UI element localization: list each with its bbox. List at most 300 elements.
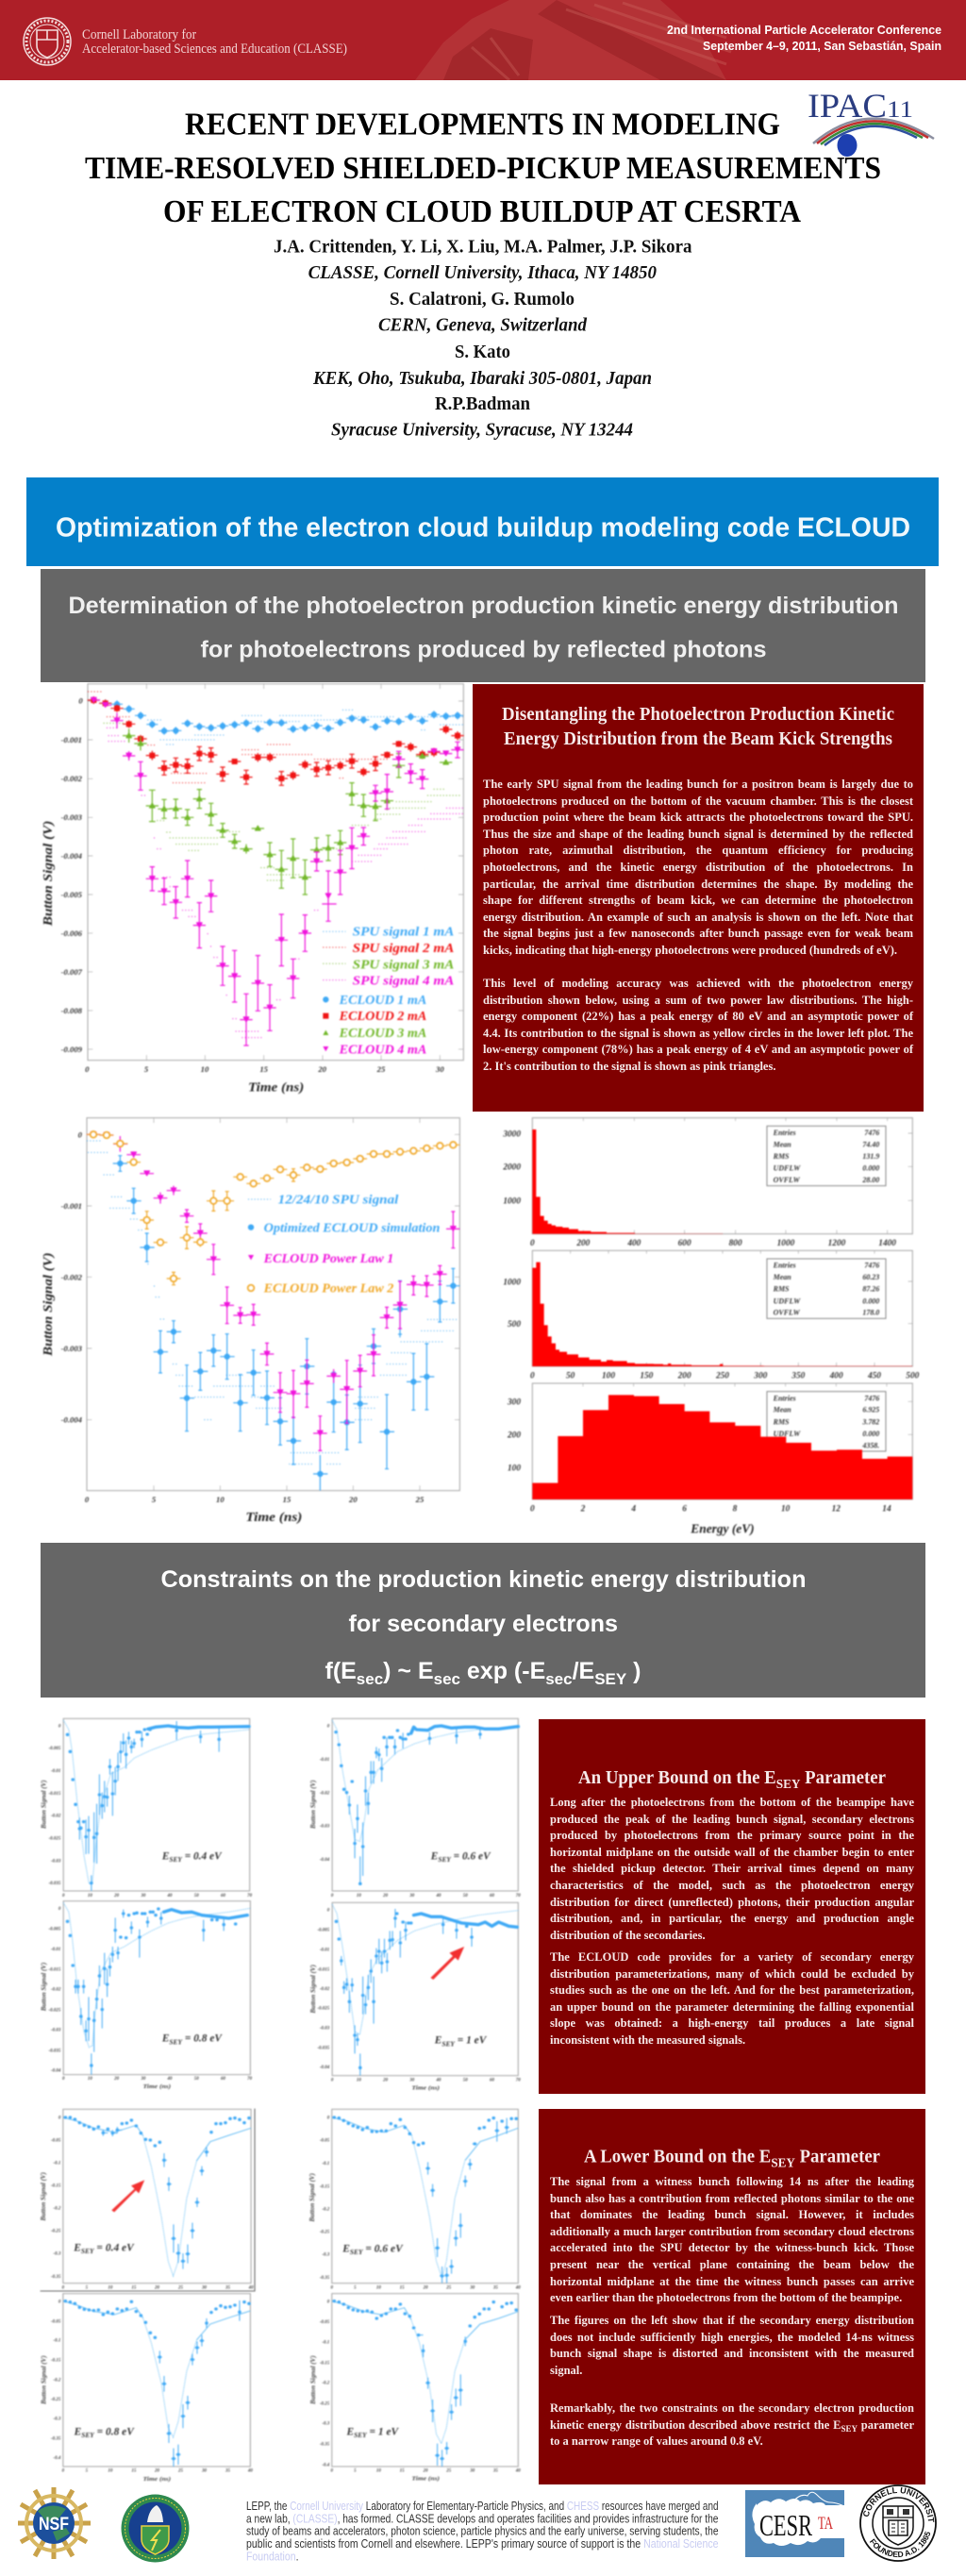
chart: lower bound, ESEY 0.8 eV: 10 (108, 2469, 113, 2474)
section heading: constraints on secondary electrons: SEY (594, 1670, 626, 1688)
chart: lower bound, ESEY 0.4 eV with arrow: 5 (86, 2286, 89, 2291)
histogram 0 to 1400 eV (503, 1117, 913, 1248)
histogram 0 to 500 eV: 300 (754, 1371, 768, 1380)
histogram 0 to 500 eV: 7476 (865, 1261, 880, 1269)
section heading: photoelectron energy distribution (41, 569, 925, 682)
chart: upper bound, ESEY 0.8 eV: 50 (194, 2077, 200, 2082)
legend: ECLOUD Power Law 2 (263, 1281, 394, 1296)
histogram 0 to 500 eV: 450 (867, 1371, 882, 1380)
chart: lower bound, ESEY 0.8 eV: 25 (177, 2469, 184, 2474)
footer text: Foundation. (246, 2550, 298, 2564)
paragraph: witness bunch signal: horizontal midplane at the time the witness bunch passes can arrive (550, 2275, 914, 2288)
section heading: constraints on secondary electrons: ) ~ E (383, 1658, 433, 1684)
panel heading: SEY (776, 1778, 800, 1792)
icon: CESR TA logo: TA (818, 2514, 833, 2534)
histogram 0 to 500 eV: OVFLW (774, 1308, 801, 1316)
section heading: constraints on secondary electrons: /E (572, 1658, 594, 1684)
paragraph: early SPU signal: particular, the arrival time distribution determines the shape. By modeling the (483, 878, 913, 891)
chart: upper bound, ESEY 0.6 eV: 70 (516, 1894, 521, 1899)
chart: lower bound, ESEY 0.8 eV: 0 (58, 2300, 61, 2305)
chart: button signal vs time for four beam currents: -0.002 (61, 774, 83, 783)
chart: lower bound, ESEY 1 eV: -0.1 (322, 2341, 329, 2346)
chart: upper bound, ESEY 1 eV with arrow (309, 1901, 522, 2092)
chart: lower bound, ESEY 0.4 eV with arrow: E (75, 2242, 82, 2254)
paragraph: witness bunch signal: The signal from a witness bunch following 14 ns after the leading (550, 2175, 914, 2188)
chart: lower bound, ESEY 0.6 eV: 35 (492, 2286, 498, 2291)
histogram 0 to 500 eV: 500 (907, 1371, 920, 1380)
section heading: constraints on secondary electrons: sec (433, 1670, 459, 1688)
chart: upper bound, ESEY 1 eV with arrow: 40 (435, 2079, 441, 2083)
chart: lower bound, ESEY 0.6 eV: 15 (400, 2286, 405, 2291)
histogram 0 to 500 eV: 350 (791, 1371, 806, 1380)
histogram 0 to 500 eV: 178.0 (863, 1308, 880, 1316)
histogram 0 to 500 eV: 500 (508, 1320, 522, 1330)
chart: button signal vs time for four beam currents: Button Signal (V) (41, 821, 55, 928)
chart: lower bound, ESEY 0.8 eV: = 0.8 eV (94, 2426, 135, 2437)
paragraph: modeling accuracy: 4.4. Its contribution to the signal is shown as yellow circles in the lower left plot. The (483, 1027, 913, 1040)
chart: lower bound, ESEY 0.4 eV with arrow: -0.3 (54, 2252, 61, 2257)
panel heading (584, 2147, 880, 2171)
chart: upper bound, ESEY 0.8 eV: -0.015 (49, 1968, 61, 1973)
histogram 0 to 1400 eV: 7476 (865, 1129, 880, 1137)
chart: lower bound, ESEY 1 eV: 15 (400, 2469, 405, 2474)
chart: lower bound, ESEY 0.8 eV: 35 (225, 2469, 231, 2474)
chart: button signal vs time for four beam currents: Time (ns) (248, 1080, 305, 1095)
chart: button signal vs time for four beam currents: -0.004 (61, 851, 83, 861)
chart: optimized ECLOUD simulation and power laws (41, 1116, 461, 1525)
histogram 0 to 15 eV: 300 (507, 1397, 522, 1407)
histogram 0 to 500 eV: 250 (715, 1371, 730, 1380)
chart: lower bound, ESEY 1 eV: 40 (515, 2469, 521, 2474)
authors and affiliations: Syracuse University, Syracuse, NY 13244 (331, 419, 633, 440)
histogram 0 to 500 eV: 150 (641, 1371, 654, 1380)
chart: upper bound, ESEY 0.4 eV: 70 (247, 1894, 253, 1899)
section banner: optimization: Optimization of the electron cloud buildup modeling code ECLOUD (56, 513, 910, 544)
chart: lower bound, ESEY 0.8 eV: 20 (154, 2469, 160, 2474)
histogram 0 to 1400 eV: UDFLW (774, 1163, 801, 1172)
chart: optimized ECLOUD simulation and power laws: 20 (348, 1495, 358, 1504)
chart: upper bound, ESEY 1 eV with arrow: 20 (382, 2079, 389, 2083)
legend: SPU signal 3 mA (353, 958, 455, 972)
chart: upper bound, ESEY 1 eV with arrow: -0.01 (320, 1949, 329, 1953)
chart: upper bound, ESEY 0.6 eV: 10 (357, 1894, 361, 1899)
histogram 0 to 15 eV: 100 (508, 1464, 522, 1473)
chart: lower bound, ESEY 0.4 eV with arrow: -0.35 (51, 2275, 61, 2280)
chart: upper bound, ESEY 0.6 eV: 50 (463, 1894, 468, 1899)
chart: lower bound, ESEY 0.4 eV with arrow: 25 (177, 2286, 184, 2291)
paragraph: early SPU signal: The early SPU signal from the leading bunch for a positron beam is largely due to (483, 778, 913, 791)
paragraph: late secondary arrivals: produced the peak of the leading bunch signal, secondary electrons (550, 1813, 914, 1826)
chart: upper bound, ESEY 0.4 eV: -0.03 (51, 1860, 61, 1865)
chart: lower bound, ESEY 0.4 eV with arrow: -0.15 (51, 2184, 61, 2189)
chart: lower bound, ESEY 0.8 eV: -0.15 (51, 2359, 61, 2364)
histogram 0 to 1400 eV: Entries (773, 1129, 796, 1137)
authors and affiliations: CLASSE, Cornell University, Ithaca, NY 14850 (308, 262, 657, 283)
chart: lower bound, ESEY 0.6 eV: 40 (515, 2286, 521, 2291)
chart: button signal vs time for four beam currents: -0.003 (61, 812, 83, 822)
ECLOUD 3 mA series (123, 729, 453, 895)
paragraph: late secondary arrivals: distribution, and, in particular, the energy and production angle (550, 1912, 914, 1925)
chart: lower bound, ESEY 0.8 eV: Time (ns) (143, 2476, 171, 2483)
histogram 0 to 1400 eV: 1400 (879, 1239, 897, 1248)
legend: SPU signal 2 mA (353, 941, 455, 955)
chart: lower bound, ESEY 0.6 eV: -0.15 (320, 2185, 330, 2190)
chart: upper bound, ESEY 0.6 eV: 40 (435, 1894, 441, 1899)
paragraph: conclusion: to a narrow range of values around 0.8 eV. (550, 2434, 763, 2448)
histogram 0 to 15 eV: 14 (883, 1504, 891, 1514)
chart: lower bound, ESEY 0.6 eV: E (342, 2243, 350, 2255)
chart: upper bound, ESEY 0.8 eV: 30 (141, 2077, 146, 2082)
paragraph: witness bunch signal: that dominates the leading bunch signal. However, it includes (550, 2208, 914, 2221)
chart: upper bound, ESEY 0.6 eV: -0.04 (320, 1858, 330, 1863)
chart: lower bound, ESEY 0.8 eV: -0.35 (51, 2437, 61, 2442)
histogram 0 to 1400 eV: OVFLW (774, 1176, 801, 1184)
chart: button signal vs time for four beam currents: 30 (435, 1064, 445, 1074)
chart: button signal vs time for four beam currents: -0.001 (61, 735, 82, 744)
section heading: constraints on secondary electrons: sec (545, 1670, 572, 1688)
histogram 0 to 1400 eV: 3000 (503, 1129, 522, 1139)
header banner (0, 0, 966, 80)
chart: lower bound, ESEY 0.8 eV: 40 (247, 2469, 254, 2474)
histogram 0 to 15 eV: 0.000 (863, 1430, 880, 1438)
chart: optimized ECLOUD simulation and power laws: -0.001 (61, 1201, 82, 1211)
chart: lower bound, ESEY 1 eV: -0.3 (322, 2422, 330, 2427)
chart: lower bound, ESEY 0.6 eV: 10 (376, 2286, 382, 2291)
chart: lower bound, ESEY 1 eV: -0.15 (320, 2362, 330, 2367)
histogram 0 to 500 eV: 1000 (504, 1278, 522, 1287)
chart: button signal vs time for four beam currents: -0.007 (61, 967, 83, 977)
paragraph: early SPU signal (483, 778, 913, 957)
chart: upper bound, ESEY 0.8 eV: Button Signal (V) (42, 1963, 48, 2013)
panel heading: Energy Distribution from the Beam Kick Strengths (504, 729, 892, 749)
paragraph: figures on the left: does not include sufficiently high energies, the modeled 14-ns witness (550, 2331, 914, 2344)
panel heading: Parameter (800, 1767, 886, 1788)
legend: SPU signal 1 mA (353, 925, 455, 939)
chart: lower bound, ESEY 0.4 eV with arrow: 10 (108, 2286, 113, 2291)
chart: lower bound, ESEY 0.6 eV: 5 (354, 2286, 357, 2291)
chart: button signal vs time for four beam currents: 15 (260, 1064, 269, 1074)
chart: upper bound, ESEY 0.4 eV (40, 1717, 253, 1899)
section heading: constraints on secondary electrons: ) (626, 1658, 641, 1684)
section heading: photoelectron energy distribution: Determination of the photoelectron production kinetic energy distribution (68, 593, 898, 619)
paragraph: ECLOUD parameterizations: studies such as the one on the left. And for the best parameterization, (550, 1983, 914, 1997)
chart: upper bound, ESEY 0.8 eV: 20 (113, 2077, 120, 2082)
histogram 0 to 500 eV (504, 1250, 920, 1380)
chart: upper bound, ESEY 0.6 eV: -0.03 (320, 1825, 330, 1830)
paragraph: conclusion: kinetic energy distribution described above restrict the ESEY parameter (550, 2418, 914, 2434)
paragraph: witness bunch signal: additionally a much larger contribution from secondary cloud electrons (550, 2225, 914, 2238)
chart: upper bound, ESEY 0.6 eV: -0.01 (320, 1758, 329, 1763)
chart: lower bound, ESEY 0.6 eV: -0.2 (322, 2208, 330, 2213)
chart: lower bound, ESEY 0.8 eV: 5 (86, 2469, 89, 2474)
chart: upper bound, ESEY 0.4 eV: 20 (113, 1894, 120, 1899)
title: OF ELECTRON CLOUD BUILDUP AT CESRTA (163, 194, 801, 229)
chart: upper bound, ESEY 0.8 eV: -0.035 (49, 2049, 61, 2054)
authors and affiliations (274, 237, 692, 440)
histogram 0 to 500 eV: 50 (566, 1371, 575, 1380)
histogram 0 to 1400 eV: 0.000 (863, 1163, 880, 1172)
power law 2 series (87, 1131, 460, 1285)
chart: upper bound, ESEY 0.4 eV: -0.01 (51, 1769, 61, 1774)
chart: upper bound, ESEY 0.8 eV: 10 (88, 2077, 93, 2082)
chart: lower bound, ESEY 0.4 eV with arrow: 35 (225, 2286, 231, 2291)
chart: lower bound, ESEY 0.8 eV: -0.4 (54, 2456, 61, 2461)
chart: upper bound, ESEY 0.4 eV: -0.02 (51, 1815, 61, 1819)
icon: IPAC11 logo: 11 (887, 97, 913, 123)
chart: lower bound, ESEY 0.8 eV: -0.1 (54, 2339, 61, 2344)
chart: upper bound, ESEY 0.6 eV: 60 (490, 1894, 495, 1899)
paragraph: witness bunch signal: present near the vertical plane containing the beam below the (550, 2258, 914, 2271)
lab name (82, 27, 347, 57)
section heading: constraints on secondary electrons: for secondary electrons (348, 1611, 617, 1637)
chart: optimized ECLOUD simulation and power laws: -0.004 (61, 1415, 83, 1425)
chart: lower bound, ESEY 1 eV: 0 (327, 2300, 330, 2305)
chart: upper bound, ESEY 0.6 eV: 20 (382, 1894, 389, 1899)
chart: upper bound, ESEY 1 eV with arrow: Time (ns) (411, 2085, 440, 2092)
chart: optimized ECLOUD simulation and power laws: 0 (78, 1130, 83, 1140)
chart: lower bound, ESEY 0.6 eV: -0.25 (320, 2231, 330, 2235)
paragraph: witness bunch signal: even earlier than the photoelectrons from the bottom of the beampipe. (550, 2291, 902, 2304)
chart: button signal vs time for four beam currents: -0.009 (61, 1045, 83, 1054)
paragraph: conclusion (550, 2401, 914, 2448)
chart: lower bound, ESEY 0.4 eV with arrow: 15 (132, 2286, 137, 2291)
chart: upper bound, ESEY 1 eV with arrow: -0.04 (320, 2066, 330, 2070)
legend: SPU signal 4 mA (353, 974, 455, 988)
chart: lower bound, ESEY 0.4 eV with arrow: 40 (248, 2286, 254, 2291)
histogram 0 to 15 eV (507, 1383, 913, 1535)
chart: lower bound, ESEY 1 eV: -0.2 (322, 2382, 330, 2386)
chart: upper bound, ESEY 0.4 eV: = 0.4 eV (182, 1850, 223, 1863)
panel heading: Disentangling the Photoelectron Production Kinetic (502, 705, 894, 725)
conference name and date: September 4–9, 2011, San Sebastián, Spain (703, 39, 941, 53)
chart: lower bound, ESEY 1 eV: -0.4 (322, 2464, 330, 2468)
histogram 0 to 15 eV: Energy (eV) (691, 1521, 755, 1535)
chart: lower bound, ESEY 0.8 eV: SEY (82, 2432, 95, 2439)
histogram 0 to 15 eV: 7476 (865, 1394, 880, 1402)
histogram 0 to 500 eV: Mean (773, 1273, 792, 1281)
ECLOUD 1 mA series (89, 696, 463, 735)
chart: upper bound, ESEY 0.8 eV: Time (ns) (143, 2083, 171, 2090)
chart: lower bound, ESEY 0.6 eV: SEY (350, 2249, 364, 2256)
paragraph: late secondary arrivals: horizontal midplane on the outside wall of the chamber begin to enter (550, 1846, 914, 1859)
paragraph: ECLOUD parameterizations: inconsistent with the measured signals. (550, 2033, 745, 2047)
chart: upper bound, ESEY 1 eV with arrow: 0 (331, 2079, 334, 2083)
paragraph: ECLOUD parameterizations (550, 1950, 914, 2047)
chart: upper bound, ESEY 1 eV with arrow: 60 (490, 2079, 495, 2083)
chart: upper bound, ESEY 0.4 eV: -0.035 (49, 1882, 61, 1886)
conference name and date (667, 23, 941, 53)
icon: NSF logo: NSF (39, 2515, 69, 2534)
chart: upper bound, ESEY 1 eV with arrow: 50 (463, 2079, 468, 2083)
chart: lower bound, ESEY 0.6 eV: Button Signal (V) (309, 2173, 316, 2223)
paragraph: ECLOUD parameterizations: The ECLOUD code provides for a variety of secondary energy (550, 1950, 914, 1964)
chart: upper bound, ESEY 1 eV with arrow: Button Signal (V) (310, 1965, 317, 2015)
paragraph: early SPU signal: production point where the beam kick attracts the photoelectrons toward the SPU. (483, 811, 913, 824)
chart: lower bound, ESEY 0.8 eV: 30 (201, 2469, 208, 2474)
authors and affiliations: S. Calatroni, G. Rumolo (390, 289, 575, 309)
panel heading (502, 705, 894, 749)
chart: upper bound, ESEY 0.6 eV (309, 1717, 522, 1899)
chart: lower bound, ESEY 0.6 eV: 20 (423, 2286, 428, 2291)
paragraph: late secondary arrivals: the shielded pickup detector. Their arrival times depend on many (550, 1862, 914, 1875)
chart: optimized ECLOUD simulation and power laws: 5 (152, 1495, 157, 1504)
chart: upper bound, ESEY 1 eV with arrow: SEY (441, 2040, 456, 2049)
paragraph: figures on the left (550, 2314, 914, 2377)
chart: lower bound, ESEY 0.4 eV with arrow: -0.2 (54, 2207, 61, 2212)
legend (324, 925, 455, 1057)
chart: upper bound, ESEY 0.8 eV: 0 (62, 2077, 65, 2082)
chart: upper bound, ESEY 0.4 eV: E (162, 1850, 170, 1863)
chart: upper bound, ESEY 1 eV with arrow: -0.03 (320, 2027, 330, 2032)
authors and affiliations: J.A. Crittenden, Y. Li, X. Liu, M.A. Palmer, J.P. Sikora (274, 237, 692, 258)
chart: upper bound, ESEY 0.4 eV: 10 (88, 1894, 93, 1899)
chart: upper bound, ESEY 0.6 eV: 30 (408, 1894, 415, 1899)
chart: lower bound, ESEY 1 eV: 20 (423, 2469, 428, 2474)
icon: IPAC11 logo (808, 90, 935, 157)
title: RECENT DEVELOPMENTS IN MODELING (185, 108, 780, 142)
histogram 0 to 1400 eV: 0 (530, 1239, 535, 1248)
chart: lower bound, ESEY 0.4 eV with arrow: SEY (81, 2248, 95, 2255)
chart: upper bound, ESEY 0.4 eV: 40 (167, 1894, 173, 1899)
chart: upper bound, ESEY 1 eV with arrow: = 1 eV (455, 2034, 488, 2047)
legend: 12/24/10 SPU signal (278, 1193, 399, 1207)
chart: lower bound, ESEY 1 eV: -0.35 (320, 2443, 330, 2448)
histogram 0 to 1400 eV: 400 (627, 1239, 641, 1248)
paragraph: witness bunch signal: accelerated into the SPU detector by the witness-bunch kick. Those (550, 2241, 914, 2254)
chart: lower bound, ESEY 0.6 eV: -0.05 (320, 2139, 330, 2144)
title (85, 108, 881, 229)
paragraph: early SPU signal: photoelectrons produced on the bottom of the vacuum chamber. This is the closest (483, 795, 913, 808)
icon: CESR TA logo: CESR (759, 2508, 812, 2542)
chart: upper bound, ESEY 0.6 eV: -0.02 (320, 1792, 330, 1797)
chart: upper bound, ESEY 0.6 eV: Button Signal (V) (310, 1781, 317, 1830)
chart: lower bound, ESEY 1 eV: SEY (354, 2432, 368, 2439)
paragraph: late secondary arrivals (550, 1796, 914, 1942)
histogram 0 to 1400 eV: 74.40 (863, 1140, 880, 1148)
paragraph: figures on the left: bunch signal shape is distorted and inconsistent with the measured (550, 2347, 914, 2360)
chart: lower bound, ESEY 1 eV: 30 (469, 2469, 475, 2474)
chart: upper bound, ESEY 0.4 eV: -0.025 (49, 1837, 61, 1842)
section heading: constraints on secondary electrons: Constraints on the production kinetic energy distribution (160, 1566, 806, 1593)
paragraph: modeling accuracy: low-energy component (78%) has a peak energy of 4 eV and an asymptotic power of (483, 1043, 913, 1056)
chart: upper bound, ESEY 1 eV with arrow: -0.025 (317, 2007, 330, 2012)
chart: lower bound, ESEY 0.4 eV with arrow: 0 (58, 2116, 61, 2121)
histogram 0 to 1400 eV: 28.00 (862, 1176, 880, 1184)
chart: button signal vs time for four beam currents (41, 682, 465, 1095)
paragraph: late secondary arrivals: produced by photoelectrons from the primary source point in the (550, 1829, 914, 1842)
chart: lower bound, ESEY 0.8 eV: -0.2 (54, 2379, 61, 2384)
chart: upper bound, ESEY 0.8 eV: -0.04 (51, 2069, 61, 2074)
histogram 0 to 15 eV: 2 (580, 1504, 586, 1514)
paragraph: figures on the left: signal. (550, 2364, 582, 2377)
chart: upper bound, ESEY 0.8 eV: 40 (167, 2077, 173, 2082)
chart: upper bound, ESEY 1 eV with arrow: -0.035 (317, 2047, 330, 2051)
paragraph: early SPU signal: energy distribution. An example of such an analysis is shown on the left. Note that (483, 911, 913, 924)
chart: optimized ECLOUD simulation and power laws: 15 (283, 1495, 291, 1504)
chart: lower bound, ESEY 0.8 eV: -0.3 (54, 2417, 61, 2422)
chart: upper bound, ESEY 0.8 eV: -0.025 (49, 2009, 61, 2014)
chart: lower bound, ESEY 1 eV: 0 (331, 2469, 334, 2474)
histogram 0 to 500 eV: Entries (773, 1261, 796, 1269)
histogram 0 to 500 eV: RMS (773, 1284, 790, 1293)
conference name and date: 2nd International Particle Accelerator Conference (667, 23, 941, 37)
legend: Optimized ECLOUD simulation (264, 1221, 441, 1235)
chart: upper bound, ESEY 1 eV with arrow: 0 (327, 1909, 330, 1914)
histogram 0 to 1400 eV: 800 (729, 1239, 742, 1248)
panel heading: A Lower Bound on the E (584, 2147, 783, 2167)
chart: upper bound, ESEY 0.8 eV: 70 (247, 2077, 253, 2082)
ECLOUD 2 mA series (88, 696, 464, 786)
chart: upper bound, ESEY 0.6 eV: SEY (438, 1856, 452, 1864)
histogram 0 to 1400 eV: 1000 (777, 1239, 795, 1248)
histogram 0 to 500 eV: 87.26 (863, 1284, 880, 1293)
authors and affiliations: S. Kato (455, 342, 510, 362)
SPU signal dots (87, 1141, 458, 1464)
chart: button signal vs time for four beam currents: 5 (144, 1064, 149, 1074)
chart: upper bound, ESEY 0.4 eV: Button Signal (V) (42, 1781, 48, 1830)
chart: upper bound, ESEY 0.8 eV: -0.03 (51, 2029, 61, 2033)
chart: lower bound, ESEY 1 eV: -0.25 (320, 2402, 330, 2407)
paragraph: late secondary arrivals: characteristics of the model, such as the photoelectron energy (550, 1879, 914, 1892)
chart: upper bound, ESEY 0.4 eV: 0 (58, 1725, 61, 1730)
paragraph: ECLOUD parameterizations: slope was obtained: a high-energy tail produces a late signal (550, 2016, 914, 2030)
chart: lower bound, ESEY 0.4 eV with arrow: -0.25 (51, 2230, 61, 2234)
chart: lower bound, ESEY 1 eV: 25 (445, 2469, 452, 2474)
histogram 0 to 500 eV: 0.000 (863, 1296, 880, 1305)
legend: ECLOUD 2 mA (339, 1009, 427, 1023)
paragraph: early SPU signal: the signal begins just a few nanoseconds after bunch passage even for weak beam (483, 927, 913, 940)
chart: button signal vs time for four beam currents: 10 (201, 1064, 209, 1074)
histogram 0 to 500 eV: 400 (829, 1371, 843, 1380)
chart: optimized ECLOUD simulation and power laws: Time (ns) (246, 1510, 303, 1524)
chart: lower bound, ESEY 0.4 eV with arrow: -0.1 (54, 2162, 61, 2166)
chart: optimized ECLOUD simulation and power laws: -0.002 (61, 1273, 83, 1282)
chart: lower bound, ESEY 0.6 eV: 30 (469, 2286, 475, 2291)
chart: upper bound, ESEY 1 eV with arrow: 70 (516, 2079, 521, 2083)
chart: lower bound, ESEY 1 eV: E (347, 2426, 355, 2437)
chart: optimized ECLOUD simulation and power laws: 25 (415, 1495, 425, 1504)
section banner: optimization (26, 477, 939, 566)
histogram 0 to 15 eV: Mean (773, 1405, 792, 1413)
chart: optimized ECLOUD simulation and power laws: 10 (216, 1495, 225, 1504)
histogram 0 to 15 eV: 10 (781, 1504, 791, 1514)
chart: upper bound, ESEY 0.4 eV: 30 (141, 1894, 146, 1899)
chart: upper bound, ESEY 0.4 eV: 0 (62, 1894, 65, 1899)
histogram 0 to 500 eV: UDFLW (774, 1296, 801, 1305)
chart: lower bound, ESEY 1 eV: = 1 eV (367, 2426, 399, 2437)
chart: upper bound, ESEY 0.8 eV: SEY (170, 2038, 184, 2047)
chart: photoelectron energy histograms (502, 1116, 921, 1536)
chart: lower bound, ESEY 1 eV: Time (ns) (411, 2476, 440, 2483)
paragraph: ECLOUD parameterizations: an upper bound on the parameter determining the falling exponential (550, 2000, 914, 2014)
histogram 0 to 500 eV: 200 (677, 1371, 691, 1380)
chart: lower bound, ESEY 0.6 eV: 0 (331, 2286, 334, 2291)
chart: button signal vs time for four beam currents: -0.008 (61, 1006, 83, 1015)
chart: lower bound, ESEY 0.6 eV: -0.35 (320, 2276, 330, 2281)
optimized simulation series (93, 1135, 460, 1491)
chart: lower bound, ESEY 0.4 eV with arrow: = 0.4 eV (94, 2242, 135, 2254)
paragraph: early SPU signal: Thus the size and shape of the leading bunch signal is determined by the reflected (483, 828, 913, 841)
histogram 0 to 15 eV: 4 (631, 1504, 637, 1514)
icon: Cornell University seal (859, 2484, 937, 2562)
chart: upper bound, ESEY 1 eV with arrow: 30 (408, 2079, 415, 2083)
section heading: constraints on secondary electrons: exp (-E (459, 1658, 545, 1684)
histogram 0 to 15 eV: 0 (530, 1504, 535, 1514)
histogram 0 to 15 eV: 3.782 (862, 1417, 880, 1426)
chart: lower bound, ESEY 0.8 eV: -0.25 (51, 2398, 61, 2402)
histogram 0 to 1400 eV: 1000 (504, 1196, 522, 1206)
chart: lower bound, ESEY 1 eV: 35 (492, 2469, 498, 2474)
